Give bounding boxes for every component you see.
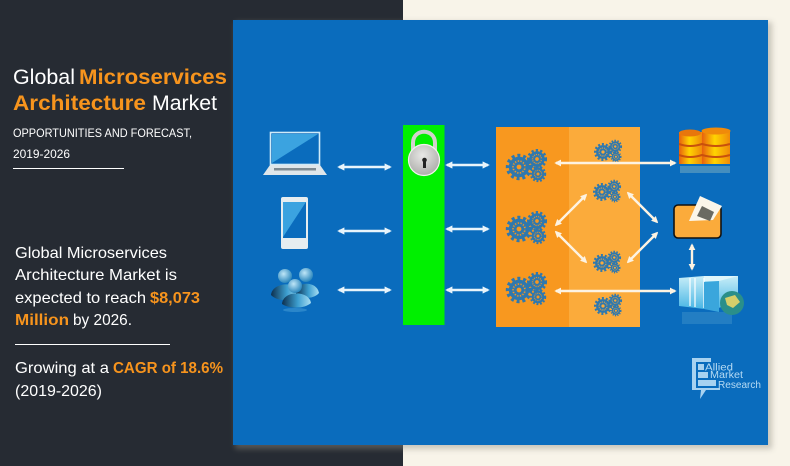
icon: folder with barcode document bbox=[674, 196, 722, 238]
market size statement: expected to reach bbox=[15, 290, 146, 307]
market size statement: $8,073 bbox=[150, 290, 200, 307]
market size statement: by 2026. bbox=[73, 312, 132, 329]
title: Architecture bbox=[13, 91, 146, 115]
icon: laptop bbox=[263, 132, 327, 175]
market size statement bbox=[15, 245, 200, 329]
arrows: gateway to services bbox=[447, 165, 488, 290]
title: Market bbox=[152, 91, 217, 115]
icon: users bbox=[271, 268, 319, 312]
title: Global bbox=[13, 65, 75, 89]
dark left background bbox=[0, 0, 403, 466]
panel: services dark orange column bbox=[496, 127, 569, 327]
icon: servers with globe bbox=[679, 276, 744, 324]
market size statement: Million bbox=[15, 312, 69, 329]
arrows: clients to gateway bbox=[339, 167, 390, 290]
icon: gears right column bbox=[594, 141, 621, 316]
CAGR statement: (2019-2026) bbox=[15, 383, 102, 400]
subtitle: OPPORTUNITIES AND FORECAST, bbox=[13, 128, 192, 140]
panel: API gateway green bar bbox=[403, 125, 444, 325]
panel: services light orange column bbox=[569, 127, 640, 327]
logo: Allied Market Research: Research bbox=[718, 380, 761, 391]
title bbox=[13, 65, 227, 115]
CAGR statement bbox=[15, 360, 223, 400]
icon: smartphone bbox=[281, 197, 308, 249]
CAGR statement: CAGR of 18.6% bbox=[113, 360, 223, 377]
subtitle bbox=[13, 128, 192, 161]
logo: Allied Market Research: Market bbox=[710, 370, 743, 381]
market size statement: Architecture Market is bbox=[15, 267, 177, 284]
market size statement: Global Microservices bbox=[15, 245, 167, 262]
arrows: services to data stores bbox=[556, 163, 692, 291]
cream right background bbox=[403, 0, 790, 466]
subtitle: 2019-2026 bbox=[13, 149, 70, 161]
icon: padlock bbox=[408, 132, 440, 176]
icon: database stacks bbox=[679, 128, 730, 173]
title: Microservices bbox=[79, 65, 227, 89]
icon: gears left column bbox=[508, 150, 546, 304]
logo: Allied Market Research: Allied bbox=[705, 362, 733, 374]
logo: Allied Market Research bbox=[692, 358, 761, 399]
CAGR statement: Growing at a bbox=[15, 360, 109, 377]
main blue panel bbox=[233, 20, 772, 449]
